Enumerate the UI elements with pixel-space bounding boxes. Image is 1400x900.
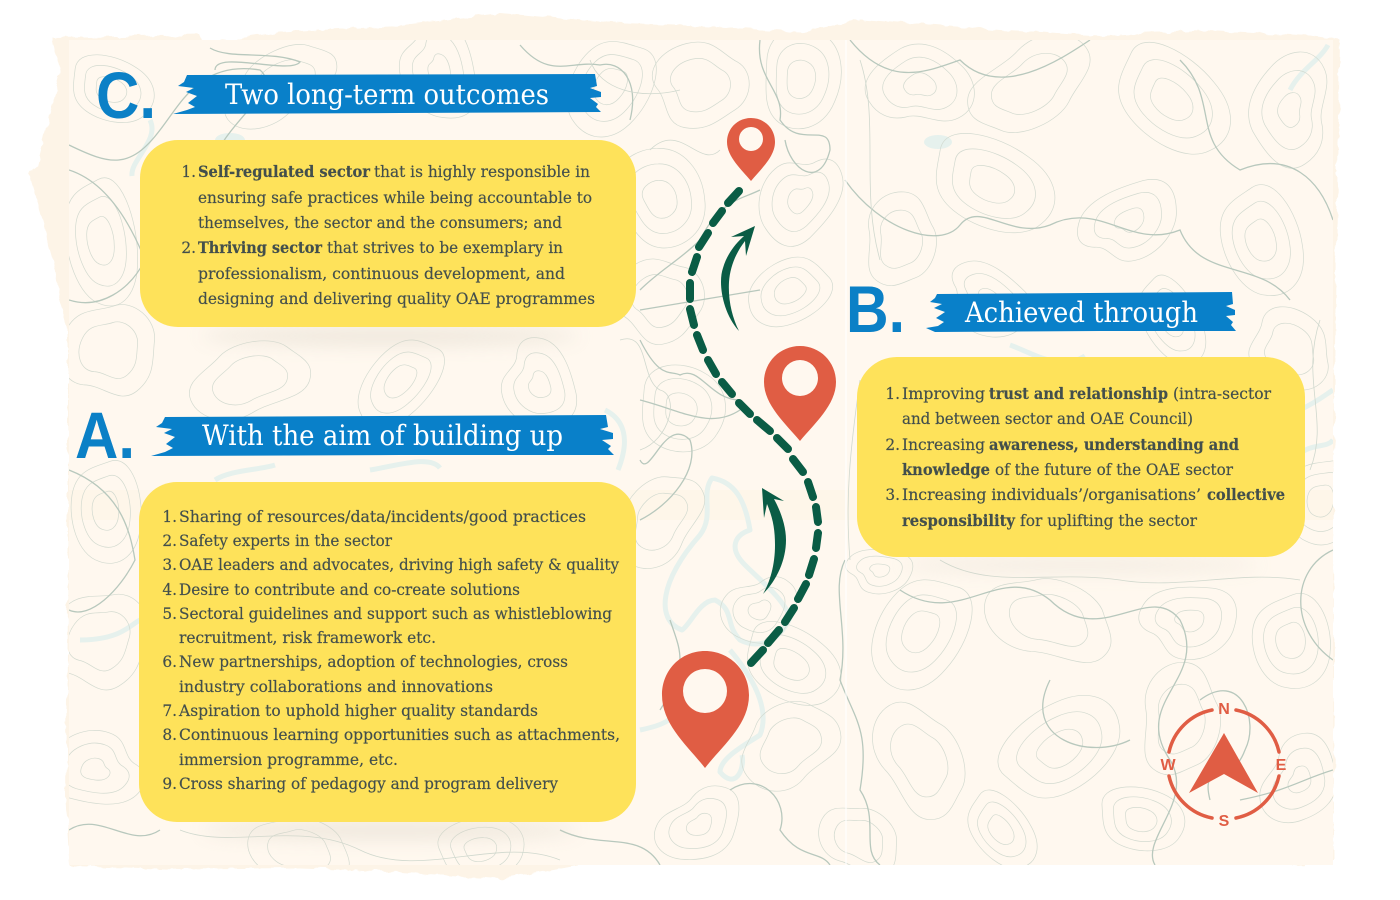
- panel C text: professionalism, continuous development, and: [198, 265, 565, 283]
- contour clusters: [73, 54, 155, 123]
- panel A text: 3.: [162, 556, 177, 574]
- banner A: With the aim of building up: [202, 419, 563, 452]
- panel A text: OAE leaders and advocates, driving high safety & quality: [179, 556, 619, 574]
- panel B text: (intra-sector: [1173, 385, 1272, 403]
- section B: [846, 272, 1305, 557]
- panel A text: Desire to contribute and co-create solutions: [179, 581, 520, 599]
- banner C: [173, 74, 601, 114]
- panel B text: of the future of the OAE sector: [995, 461, 1234, 479]
- water channels: [80, 45, 1333, 779]
- panel A text: Continuous learning opportunities such as attachments,: [179, 726, 620, 744]
- section A: [75, 398, 636, 822]
- heading letter C: C.: [96, 58, 156, 132]
- panel C text: [140, 140, 636, 327]
- box shadows: [200, 327, 1260, 839]
- panel A text: 8.: [162, 726, 177, 744]
- panel B text: knowledge: [902, 461, 990, 479]
- compass: N: [1218, 701, 1230, 718]
- panel B text: 3.: [885, 486, 900, 504]
- panel A text: Sharing of resources/data/incidents/good practices: [179, 508, 586, 526]
- panel B text: Increasing individuals’/organisations’: [902, 486, 1201, 504]
- panel A text: 6.: [162, 653, 177, 671]
- panel B text: trust and relationship: [989, 385, 1168, 403]
- panel B text: collective: [1207, 486, 1285, 504]
- panel C text: 1.: [181, 163, 196, 181]
- heading letter B: B.: [846, 272, 905, 346]
- panel C text: Thriving sector: [198, 239, 323, 257]
- panel C text: designing and delivering quality OAE programmes: [198, 290, 595, 308]
- panel A text: [139, 482, 636, 822]
- panel C text: ensuring safe practices while being accountable to: [198, 189, 592, 207]
- panel A text: New partnerships, adoption of technologies, cross: [179, 653, 568, 671]
- compass: [1160, 701, 1287, 830]
- panel A text: Cross sharing of pedagogy and program delivery: [179, 775, 558, 793]
- panel C text: that is highly responsible in: [374, 163, 590, 181]
- panel A text: Aspiration to uphold higher quality standards: [178, 702, 538, 720]
- panel B text: and between sector and OAE Council): [902, 410, 1193, 428]
- panel A text: immersion programme, etc.: [179, 751, 398, 769]
- fold seam: [845, 40, 847, 865]
- panel A text: 7.: [162, 702, 177, 720]
- pin: middle: [764, 346, 836, 441]
- panel B text: Increasing: [902, 436, 985, 454]
- section C: [96, 58, 636, 327]
- banner B: Achieved through: [964, 296, 1198, 329]
- heading letter A: A.: [75, 398, 135, 472]
- panel A text: Safety experts in the sector: [179, 532, 393, 550]
- compass needle: [1189, 733, 1258, 793]
- panel B text: [857, 357, 1305, 557]
- compass ring: [1169, 710, 1279, 818]
- panel A text: Sectoral guidelines and support such as whistleblowing: [179, 605, 612, 623]
- panel A text: 9.: [162, 775, 177, 793]
- pin: large bottom: [662, 651, 749, 768]
- pin: small top: [727, 118, 775, 181]
- panel B text: responsibility: [902, 512, 1016, 530]
- compass: S: [1219, 813, 1230, 830]
- panel C text: that strives to be exemplary in: [327, 239, 563, 257]
- banner A: [151, 415, 614, 456]
- panel B text: awareness, understanding and: [989, 436, 1239, 454]
- banner C: Two long-term outcomes: [225, 78, 549, 111]
- panel B text: 2.: [885, 436, 900, 454]
- panel A text: industry collaborations and innovations: [179, 678, 493, 696]
- arrow: lower curved: [762, 488, 786, 594]
- panel B text: 1.: [885, 385, 900, 403]
- panel B text: for uplifting the sector: [1020, 512, 1198, 530]
- panel B text: Improving: [902, 385, 985, 403]
- banner B: [926, 292, 1236, 332]
- arrow: upper curved: [721, 226, 755, 331]
- panel A text: 2.: [162, 532, 177, 550]
- panel A text: 4.: [162, 581, 177, 599]
- compass: E: [1276, 757, 1287, 774]
- panel A text: recruitment, risk framework etc.: [179, 629, 436, 647]
- panel A text: 5.: [162, 605, 177, 623]
- route: dashed path: [690, 191, 818, 663]
- panel C text: 2.: [181, 239, 196, 257]
- panel C text: Self-regulated sector: [198, 163, 371, 181]
- panel A text: 1.: [162, 508, 177, 526]
- panel C text: themselves, the sector and the consumers; and: [198, 214, 562, 232]
- compass: W: [1160, 757, 1176, 774]
